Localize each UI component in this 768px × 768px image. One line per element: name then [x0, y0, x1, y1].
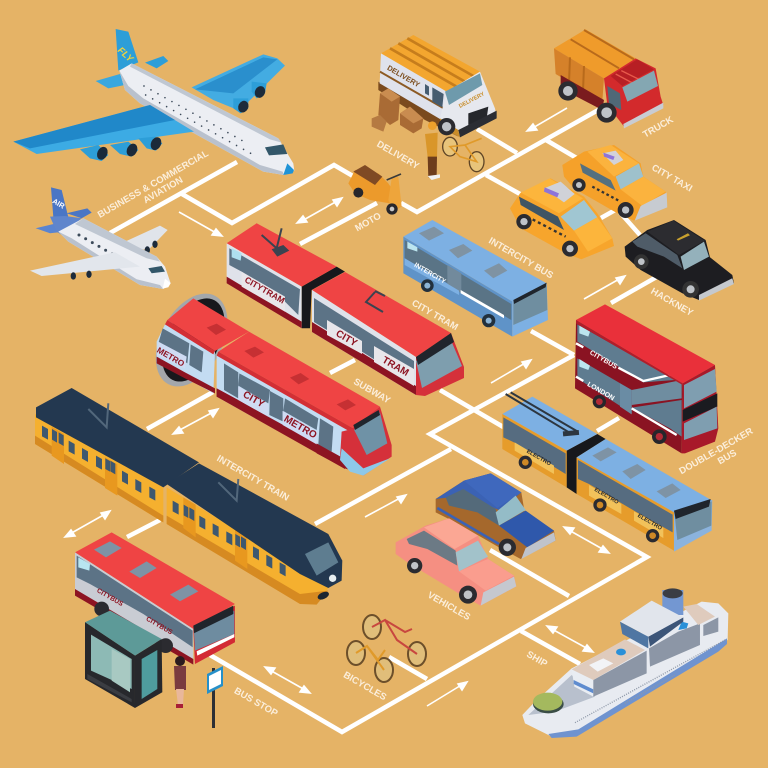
bus shelter — [85, 611, 162, 708]
labels: INTERCITY BUS — [487, 236, 555, 281]
cruise ship — [522, 588, 728, 738]
labels: MOTO — [353, 211, 383, 234]
labels: BUS STOP — [232, 686, 280, 720]
pink sedan — [396, 518, 516, 606]
direction arrows — [65, 108, 625, 706]
city bus: CITYBUS — [95, 587, 125, 608]
truck — [554, 29, 663, 128]
intercity bus: INTERCITY — [413, 262, 447, 286]
airplane: FLY commercial jet — [13, 29, 294, 175]
delivery van with parcels: DELIVERY — [386, 63, 422, 89]
labels: SUBWAY — [351, 376, 393, 407]
delivery van with parcels: DELIVERY — [458, 91, 486, 110]
subway train with tunnel — [141, 281, 392, 476]
city taxi modern — [510, 178, 614, 259]
trolleybus electro: ELECTRO — [636, 513, 663, 532]
double-decker bus — [575, 304, 718, 453]
city tram — [227, 223, 464, 396]
city bus — [75, 532, 235, 665]
double-decker bus: CITYBUS — [588, 349, 619, 371]
intercity bus — [403, 220, 548, 337]
labels: BUS — [716, 448, 739, 467]
bus stop sign — [207, 666, 223, 728]
intercity train — [35, 388, 342, 605]
labels: SHIP — [524, 649, 550, 670]
trolleybus electro — [502, 392, 712, 552]
subway train with tunnel: METRO — [155, 345, 187, 369]
labels: HACKNEY — [649, 286, 695, 319]
labels: AVIATION — [141, 175, 185, 206]
labels: CITY TRAM — [410, 298, 460, 333]
labels — [96, 114, 755, 720]
labels: BICYCLES — [341, 670, 388, 703]
trolleybus electro: ELECTRO — [593, 487, 620, 506]
delivery van with parcels — [372, 35, 497, 137]
scooter — [348, 165, 402, 215]
labels: DELIVERY — [375, 139, 421, 172]
parcels — [372, 88, 423, 133]
labels: DOUBLE-DECKER — [677, 426, 755, 477]
trolleybus electro: ELECTRO — [525, 449, 552, 468]
subway train with tunnel: CITY — [241, 389, 266, 410]
labels: TRUCK — [641, 114, 676, 141]
city tram: CITY — [334, 328, 359, 349]
city taxi classic — [562, 145, 667, 221]
city tram: CITYTRAM — [243, 275, 287, 306]
city bus: CITYBUS — [145, 616, 174, 637]
bicycles — [347, 615, 426, 682]
airplane: AIR small jet — [30, 187, 171, 289]
delivery man with bicycle — [425, 121, 484, 180]
blue estate car — [436, 473, 556, 559]
flow network lines — [110, 109, 660, 732]
double-decker bus: LONDON — [586, 381, 615, 402]
city tram: TRAM — [380, 355, 411, 379]
labels: INTERCITY TRAIN — [215, 453, 291, 504]
labels: BUSINESS & COMMERCIAL — [96, 148, 211, 221]
labels: VEHICLES — [425, 590, 472, 623]
woman waiting — [174, 656, 186, 708]
hackney black cab — [625, 220, 734, 301]
airplane: AIR small jet: AIR — [51, 196, 67, 211]
subway train with tunnel: METRO — [282, 414, 319, 441]
labels: CITY TAXI — [649, 162, 694, 194]
airplane: FLY commercial jet: FLY — [116, 45, 136, 64]
